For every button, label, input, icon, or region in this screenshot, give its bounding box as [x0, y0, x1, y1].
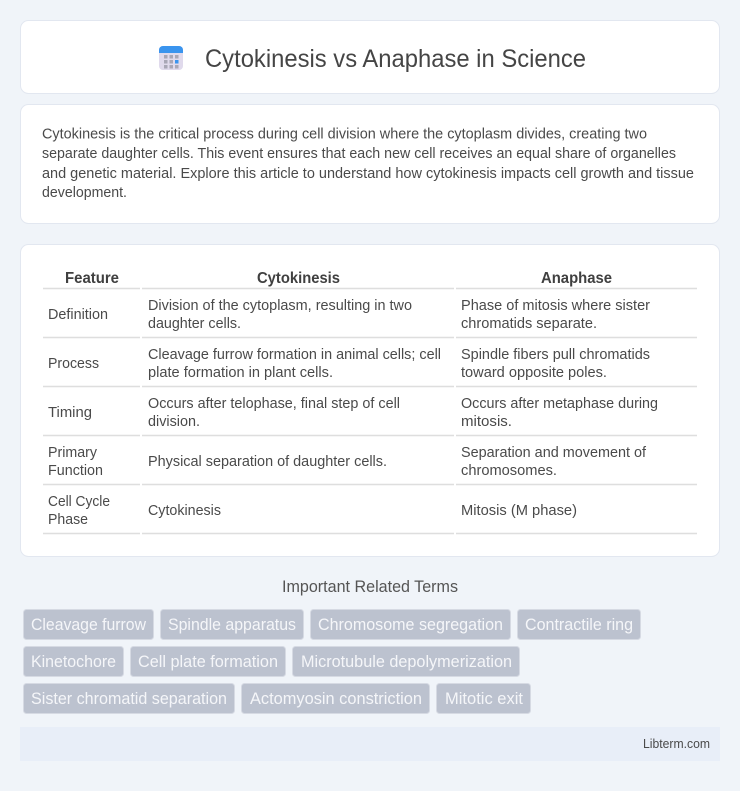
table header: Feature [65, 270, 119, 287]
row: definition: Phase of mitosis where sister [461, 298, 650, 314]
footer credit: Libterm.com [643, 737, 710, 751]
tag [130, 646, 286, 676]
row: definition [48, 298, 650, 332]
title: Cytokinesis vs Anaphase in Science [205, 45, 586, 73]
tag: Chromosome segregation [318, 615, 503, 634]
tag [24, 684, 234, 714]
row: definition: chromatids separate. [461, 316, 597, 332]
row: process: Spindle fibers pull chromatids [461, 347, 650, 363]
panel: comparison table [20, 244, 720, 556]
tag: Cell plate formation [138, 652, 278, 671]
row: timing: Timing [48, 405, 92, 421]
tag: Microtubule depolymerization [301, 652, 512, 671]
table header: Anaphase [541, 270, 612, 287]
footer [20, 727, 720, 761]
row: primary function [48, 445, 647, 479]
row: cell cycle phase: Mitosis (M phase) [461, 503, 577, 519]
row: definition: Division of the cytoplasm, resulting in two [148, 298, 412, 314]
intro paragraph [42, 126, 694, 201]
tag: Contractile ring [525, 615, 633, 634]
tag [24, 610, 154, 640]
intro paragraph: Cytokinesis is the critical process during cell division where the cytoplasm divides, creating two [42, 126, 647, 142]
related term tags [24, 610, 640, 714]
row: definition: Definition [48, 307, 108, 323]
row: process: Cleavage furrow formation in animal cells; cell [148, 347, 441, 363]
row: process: plate formation in plant cells. [148, 365, 333, 381]
header panel [20, 20, 720, 94]
row: cell cycle phase: Cell Cycle [48, 494, 110, 510]
row: timing: mitosis. [461, 414, 512, 430]
tag: Mitotic exit [445, 689, 523, 708]
table header: Cytokinesis [257, 270, 340, 287]
tag [310, 610, 510, 640]
row: primary function: Primary [48, 445, 98, 461]
intro paragraph: and genetic material. Explore this article to understand how cytokinesis impacts cell growth and tissue [42, 166, 694, 182]
row: primary function: chromosomes. [461, 463, 557, 479]
tag: Kinetochore [31, 652, 116, 671]
table header [65, 270, 612, 287]
row: timing: Occurs after metaphase during [461, 396, 658, 412]
intro paragraph: separate daughter cells. This event ensures that each new cell receives an equal share of organelles [42, 146, 676, 162]
row: cell cycle phase: Cytokinesis [148, 503, 221, 519]
icon: calendar [159, 46, 183, 70]
row: primary function: Separation and movement of [461, 445, 647, 461]
tag: Spindle apparatus [168, 615, 296, 634]
tag: Sister chromatid separation [31, 689, 227, 708]
tag [292, 646, 520, 676]
row: process: toward opposite poles. [461, 365, 607, 381]
tag [24, 646, 124, 676]
tag: Cleavage furrow [31, 615, 147, 634]
row: definition: daughter cells. [148, 316, 241, 332]
row: cell cycle phase: Phase [48, 512, 88, 528]
row: cell cycle phase [48, 494, 577, 528]
row: timing: division. [148, 414, 200, 430]
row: timing [48, 396, 658, 430]
tag [242, 684, 430, 714]
intro paragraph: development. [42, 185, 127, 201]
row: primary function: Function [48, 463, 103, 479]
row: process [48, 347, 650, 381]
heading: important related terms: Important Related Terms [282, 578, 458, 596]
tag [160, 610, 304, 640]
tag [518, 610, 640, 640]
row: timing: Occurs after telophase, final step of cell [148, 396, 400, 412]
tag: Actomyosin constriction [250, 689, 422, 708]
tag [436, 684, 530, 714]
row: primary function: Physical separation of daughter cells. [148, 454, 387, 470]
panel: introduction [20, 104, 720, 224]
row: process: Process [48, 356, 99, 372]
